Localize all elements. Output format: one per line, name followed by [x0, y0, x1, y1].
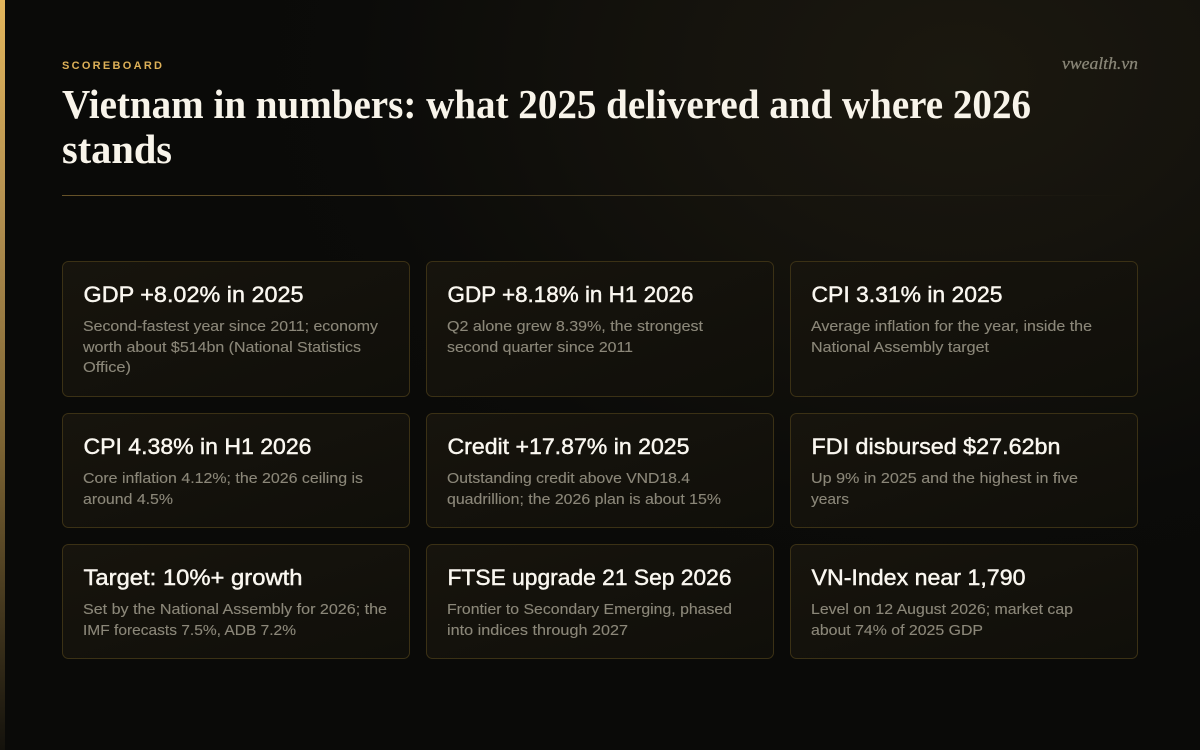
card text: Q2 alone grew 8.39%, the strongest	[447, 319, 703, 335]
card text: into indices through 2027	[447, 623, 628, 639]
card text: Up 9% in 2025 and the highest in five	[811, 471, 1078, 487]
card text	[83, 471, 363, 508]
card: FTSE	[426, 544, 774, 658]
card heading: FTSE upgrade 21 Sep 2026	[448, 565, 732, 590]
card heading: GDP +8.18% in H1 2026	[448, 282, 694, 307]
left accent bar	[0, 0, 5, 750]
card heading: VN-Index near 1,790	[812, 565, 1026, 590]
card text: quadrillion; the 2026 plan is about 15%	[447, 492, 721, 508]
card text: Level on 12 August 2026; market cap	[811, 602, 1073, 618]
card text: Set by the National Assembly for 2026; the	[83, 602, 387, 618]
card text: Frontier to Secondary Emerging, phased	[447, 602, 732, 618]
card: FDI	[790, 414, 1138, 528]
card heading: CPI 4.38% in H1 2026	[84, 434, 312, 459]
card heading: CPI 3.31% in 2025	[812, 282, 1002, 307]
card: GDP 2025	[62, 262, 410, 396]
card text: Core inflation 4.12%; the 2026 ceiling is	[83, 471, 363, 487]
card: CPI H1 2026	[62, 414, 410, 528]
card text: second quarter since 2011	[447, 340, 633, 356]
title: stands	[62, 126, 172, 172]
card text	[447, 319, 703, 356]
card: Target	[62, 544, 410, 658]
card text	[82, 319, 379, 376]
card text: Average inflation for the year, inside the	[811, 319, 1092, 335]
card heading: FDI disbursed $27.62bn	[812, 434, 1060, 459]
card text	[447, 471, 721, 508]
card text	[447, 602, 732, 639]
card text	[83, 602, 387, 639]
card text: worth about $514bn (National Statistics	[82, 340, 361, 356]
card: VN-Index	[790, 544, 1138, 658]
card text: about 74% of 2025 GDP	[811, 623, 983, 639]
brand mark: vwealth.vn	[1062, 54, 1138, 73]
card text: Second-fastest year since 2011; economy	[83, 319, 379, 335]
title	[62, 81, 1031, 172]
card: Credit	[426, 414, 774, 528]
title: Vietnam in numbers: what 2025 delivered and where 2026	[62, 81, 1031, 127]
card text: IMF forecasts 7.5%, ADB 7.2%	[83, 623, 296, 639]
card heading: Target: 10%+ growth	[84, 565, 302, 590]
card text	[811, 602, 1073, 639]
card: CPI 2025	[790, 262, 1138, 396]
card text: Office)	[83, 360, 131, 376]
card text: years	[811, 492, 849, 508]
card: GDP H1 2026	[426, 262, 774, 396]
eyebrow label: SCOREBOARD	[62, 60, 162, 72]
card heading: Credit +17.87% in 2025	[448, 434, 690, 459]
card heading: GDP +8.02% in 2025	[84, 282, 304, 307]
card text	[811, 319, 1092, 356]
card text: around 4.5%	[83, 492, 173, 508]
card text: National Assembly target	[811, 340, 989, 356]
card text: Outstanding credit above VND18.4	[447, 471, 690, 487]
card text	[811, 471, 1078, 508]
